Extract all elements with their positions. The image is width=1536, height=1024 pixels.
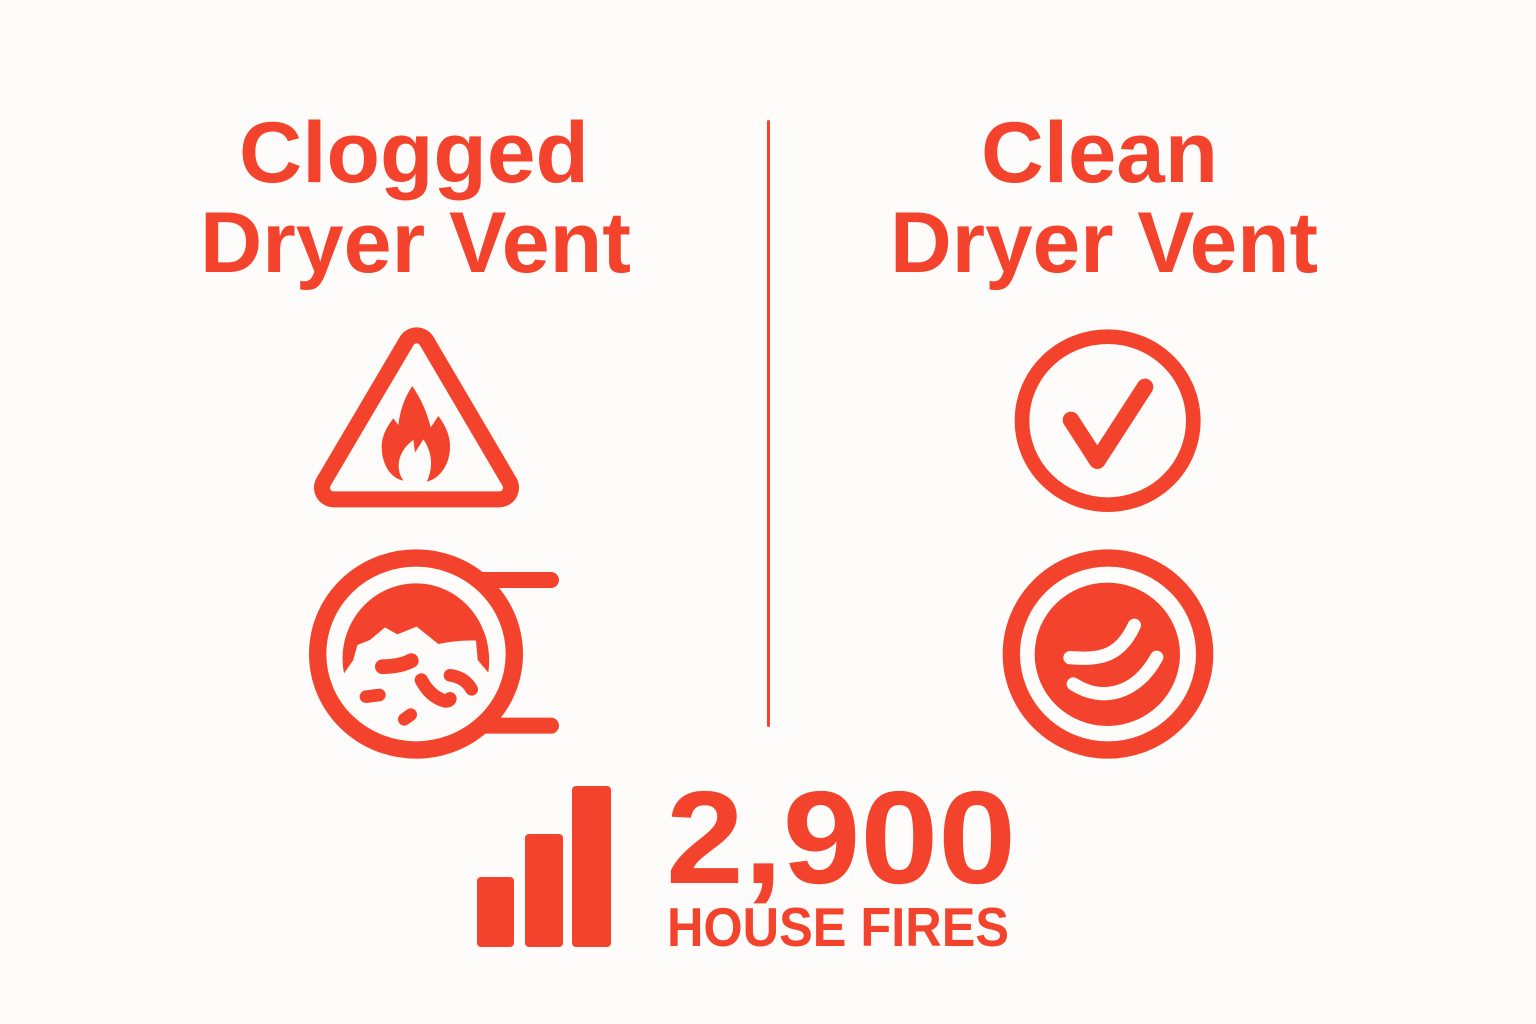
clear vent disc (1035, 583, 1180, 726)
center divider (767, 120, 770, 727)
heading: clean dryer vent: Clean (981, 105, 1218, 201)
vent ring (318, 558, 514, 750)
icon: bar chart (477, 786, 611, 947)
icon: check mark circle (1022, 337, 1193, 505)
vent pipes (483, 580, 551, 726)
lint fragments (366, 661, 472, 719)
vent ring (1011, 558, 1205, 750)
heading: clean dryer vent (890, 105, 1318, 291)
statistic: 2,900 house fires: 2,900 (666, 764, 1016, 911)
heading: clogged dryer vent (200, 105, 631, 291)
icon: fire warning triangle (322, 335, 511, 499)
icon: clogged vent drum with lint (318, 558, 551, 750)
heading: clogged dryer vent: Clogged (239, 105, 589, 201)
icon: clean vent drum (1011, 558, 1205, 750)
airflow lines (1070, 625, 1157, 694)
statistic: 2,900 house fires: HOUSE FIRES (667, 896, 1009, 958)
heading: clogged dryer vent: Dryer Vent (200, 195, 631, 291)
lint buildup (343, 583, 489, 673)
heading: clean dryer vent: Dryer Vent (890, 195, 1318, 291)
